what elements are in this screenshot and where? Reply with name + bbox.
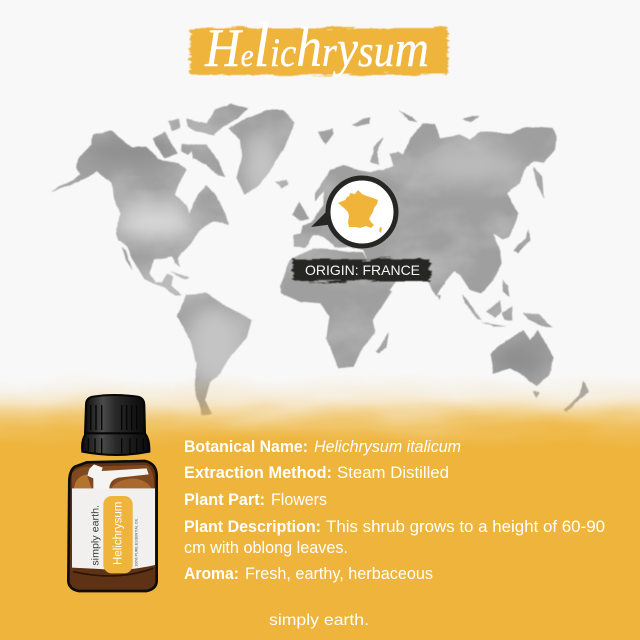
amber highlight right xyxy=(112,478,152,488)
botanical name: Helichrysum italicum xyxy=(314,438,461,456)
bottle name: Helichrysum xyxy=(110,502,124,565)
plant description: Plant Description: xyxy=(184,518,321,536)
botanical name xyxy=(184,438,461,456)
bottle fine print: 100% PURE ESSENTIAL OIL xyxy=(135,518,139,567)
label brush background xyxy=(293,259,430,281)
world map xyxy=(51,103,590,416)
bottom glass curve xyxy=(73,568,153,576)
origin label xyxy=(293,259,430,281)
aroma: Fresh, earthy, herbaceous xyxy=(245,565,433,583)
yellow watercolor wash xyxy=(0,370,640,640)
essential oil bottle xyxy=(68,395,157,591)
aroma: Aroma: xyxy=(184,565,239,583)
product facts xyxy=(184,438,605,583)
white highlight xyxy=(87,464,149,489)
plant part: Flowers xyxy=(271,491,327,509)
cap ridges xyxy=(88,405,143,453)
plant description xyxy=(184,518,605,557)
title banner xyxy=(190,9,448,80)
white label xyxy=(72,488,155,570)
callout circle xyxy=(328,178,396,246)
title text: Helichrysum xyxy=(204,9,429,80)
plant part: Plant Part: xyxy=(184,491,265,509)
France silhouette xyxy=(338,190,382,233)
extraction method xyxy=(184,464,449,482)
plant part xyxy=(184,491,327,509)
extraction method: Extraction Method: xyxy=(184,464,332,482)
botanical name: Botanical Name: xyxy=(184,438,308,456)
footer brand: simply earth. xyxy=(269,612,369,629)
bottle brand: simply earth. xyxy=(91,505,102,566)
plant description: This shrub grows to a height of 60-90 xyxy=(326,518,605,536)
label text: ORIGIN: FRANCE xyxy=(305,262,420,278)
yellow name pill xyxy=(103,496,133,573)
extraction method: Steam Distilled xyxy=(337,464,449,482)
amber highlight left xyxy=(74,474,92,488)
amber shoulder xyxy=(72,465,154,488)
bottle glass xyxy=(68,461,157,591)
plant description: cm with oblong leaves. xyxy=(184,539,348,557)
brush stroke xyxy=(190,28,448,75)
origin marker xyxy=(311,178,396,246)
callout tail xyxy=(311,211,334,227)
cap band xyxy=(82,433,149,455)
cap top xyxy=(85,395,145,433)
